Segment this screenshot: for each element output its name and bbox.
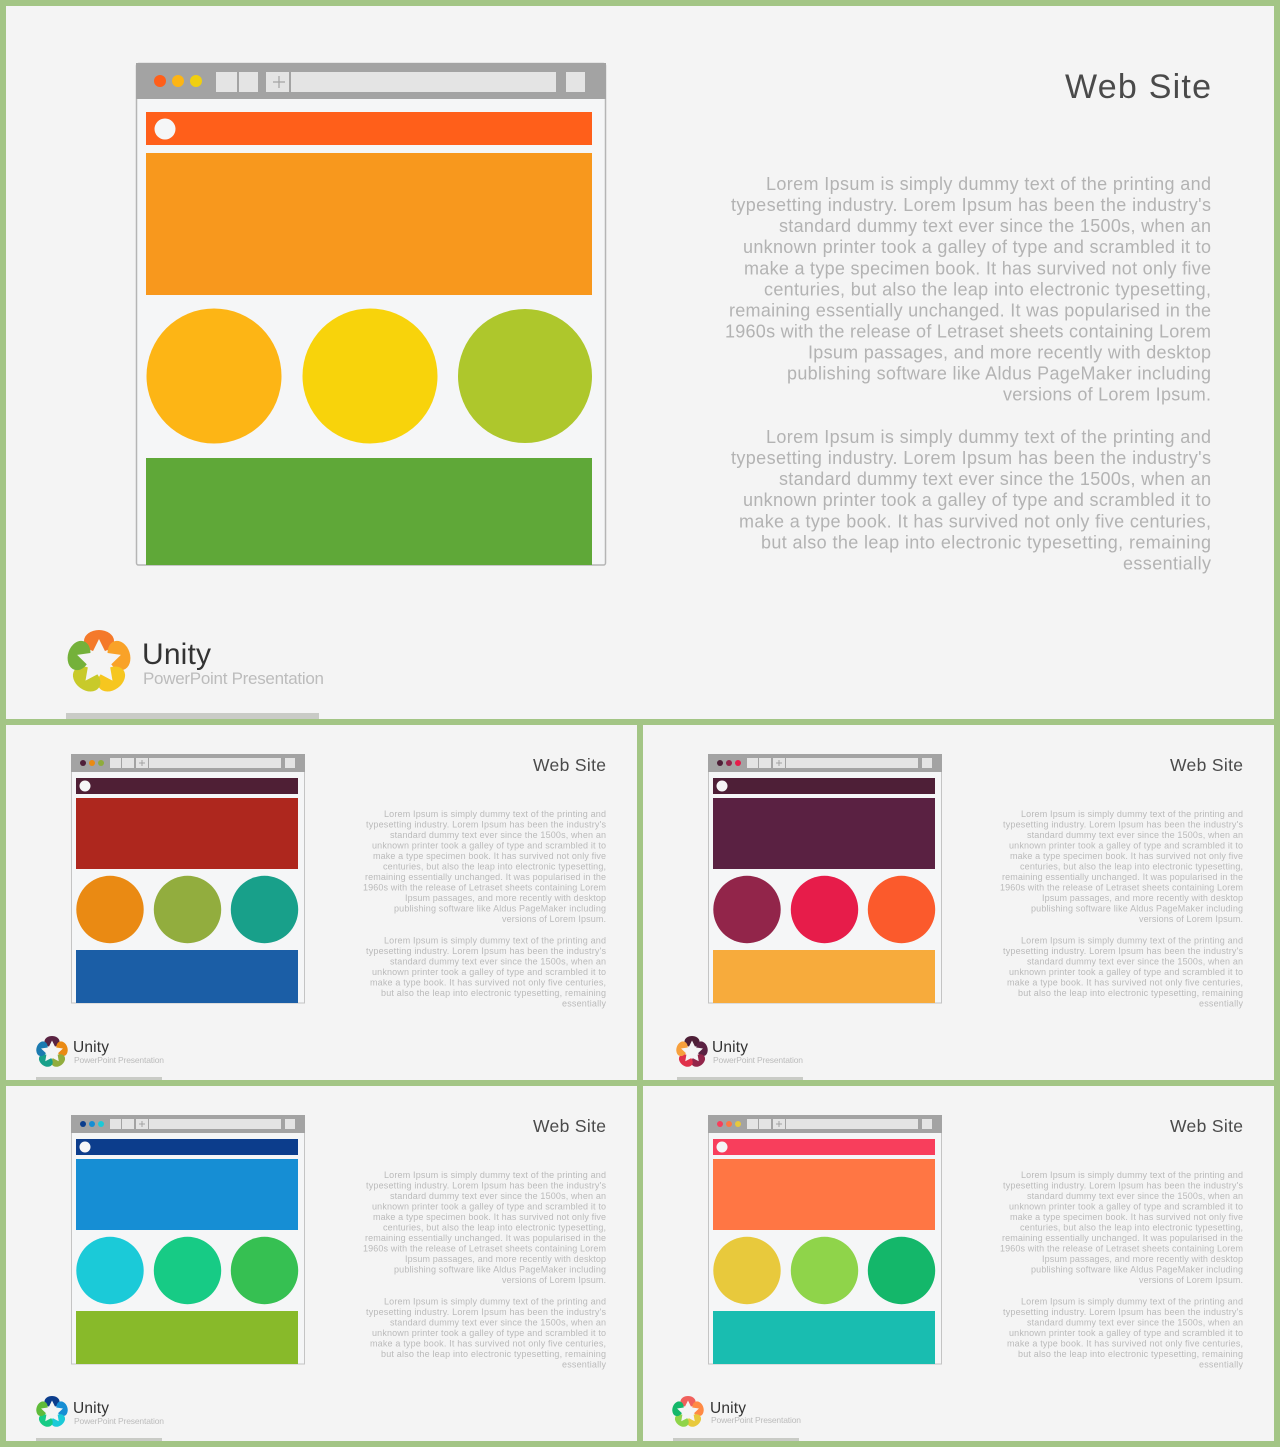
text block: Lorem Ipsum is simply dummy text of the printing and [1021,809,1243,819]
text block: remaining essentially unchanged. It was popularised in the [729,300,1211,320]
text block: but also the leap into electronic typesetting, remaining [761,532,1211,552]
text block: typesetting industry. Lorem Ipsum has been the industry's [1003,1307,1244,1317]
icon: logo [670,1396,706,1429]
text block: standard dummy text ever since the 1500s, when an [779,469,1211,489]
title: Web Site [1170,755,1243,775]
text block: unknown printer took a galley of type and scrambled it to [1009,1202,1243,1212]
text block: publishing software like Aldus PageMaker including [394,904,606,914]
text block: make a type book. It has survived not only five centuries, [1007,978,1243,988]
text block: versions of Lorem Ipsum. [1003,385,1211,405]
panel: red and blue variant [34,754,607,1080]
icon: logo [64,630,134,697]
brand name: Unity [710,1400,746,1417]
text block: typesetting industry. Lorem Ipsum has been the industry's [366,1307,606,1317]
text block: Lorem Ipsum is simply dummy text of the printing and [1021,1170,1243,1180]
text block: but also the leap into electronic typesetting, remaining [381,988,606,998]
text block: make a type book. It has survived not only five centuries, [1007,1338,1243,1348]
text block: publishing software like Aldus PageMaker including [787,364,1211,384]
brand subtitle: PowerPoint Presentation [713,1055,803,1065]
text block: Ipsum passages, and more recently with desktop [405,893,606,903]
text block: make a type specimen book. It has survived not only five [744,258,1211,278]
brand name: Unity [712,1039,748,1056]
text block: Lorem Ipsum is simply dummy text of the printing and [384,1170,606,1180]
text block: standard dummy text ever since the 1500s, when an [1027,830,1243,840]
text block: typesetting industry. Lorem Ipsum has been the industry's [1003,820,1244,830]
text block: essentially [1199,998,1244,1008]
title: Web Site [1170,1116,1243,1136]
title: Web Site [1065,68,1211,106]
text block: standard dummy text ever since the 1500s, when an [390,1191,606,1201]
text block: remaining essentially unchanged. It was popularised in the [1002,872,1243,882]
text block: typesetting industry. Lorem Ipsum has been the industry's [366,946,606,956]
text block: publishing software like Aldus PageMaker including [1031,1264,1243,1274]
icon: logo [34,1036,70,1069]
text block: make a type specimen book. It has survived not only five [373,851,606,861]
text block: unknown printer took a galley of type and scrambled it to [1009,1328,1243,1338]
text block: but also the leap into electronic typesetting, remaining [1018,988,1243,998]
text block: 1960s with the release of Letraset sheets containing Lorem [725,322,1211,342]
text block: but also the leap into electronic typesetting, remaining [1018,1349,1243,1359]
brand subtitle: PowerPoint Presentation [74,1416,164,1426]
text block: typesetting industry. Lorem Ipsum has been the industry's [1003,946,1244,956]
text block: unknown printer took a galley of type and scrambled it to [372,1202,606,1212]
text block: unknown printer took a galley of type and scrambled it to [1009,967,1243,977]
text block: remaining essentially unchanged. It was popularised in the [365,872,606,882]
text block [363,1170,606,1370]
text block: typesetting industry. Lorem Ipsum has been the industry's [366,820,606,830]
text block: standard dummy text ever since the 1500s, when an [1027,956,1243,966]
panel: maroon and coral variant [674,754,1244,1080]
browser window illustration [708,754,942,1003]
text block: remaining essentially unchanged. It was popularised in the [365,1233,606,1243]
text block: essentially [1123,554,1211,574]
brand name: Unity [142,638,211,671]
text block: standard dummy text ever since the 1500s, when an [779,216,1211,236]
text block: publishing software like Aldus PageMaker including [394,1264,606,1274]
text block: unknown printer took a galley of type and scrambled it to [743,237,1211,257]
text block: make a type specimen book. It has survived not only five [1010,1212,1243,1222]
text block: 1960s with the release of Letraset sheets containing Lorem [1000,882,1243,892]
text block: unknown printer took a galley of type and scrambled it to [372,967,606,977]
text block: Lorem Ipsum is simply dummy text of the printing and [384,936,606,946]
text block: Lorem Ipsum is simply dummy text of the printing and [384,1296,606,1306]
text block: make a type book. It has survived not only five centuries, [370,978,606,988]
text block: 1960s with the release of Letraset sheets containing Lorem [1000,1244,1243,1254]
brand subtitle: PowerPoint Presentation [711,1415,801,1425]
brand name: Unity [73,1039,109,1056]
panel: coral and teal variant [670,1115,1244,1441]
text block: centuries, but also the leap into electronic typesetting, [383,1222,606,1232]
text block: Lorem Ipsum is simply dummy text of the printing and [766,174,1211,194]
text block: remaining essentially unchanged. It was popularised in the [1002,1233,1243,1243]
text block: Lorem Ipsum is simply dummy text of the printing and [1021,936,1243,946]
text block: Lorem Ipsum is simply dummy text of the printing and [766,427,1211,447]
text block: standard dummy text ever since the 1500s, when an [1027,1318,1243,1328]
text block: typesetting industry. Lorem Ipsum has been the industry's [731,195,1211,215]
text block: essentially [562,998,606,1008]
text block: 1960s with the release of Letraset sheets containing Lorem [363,1244,606,1254]
text block: unknown printer took a galley of type and scrambled it to [372,1328,606,1338]
text block: centuries, but also the leap into electronic typesetting, [1020,1222,1243,1232]
text block: versions of Lorem Ipsum. [1139,1275,1243,1285]
panel: main slide [64,63,1211,719]
text block: make a type book. It has survived not only five centuries, [739,511,1211,531]
text block: centuries, but also the leap into electronic typesetting, [383,862,606,872]
text block [725,174,1211,574]
text block: 1960s with the release of Letraset sheets containing Lorem [363,882,606,892]
text block: essentially [562,1360,606,1370]
browser window illustration [71,754,305,1003]
text block: unknown printer took a galley of type and scrambled it to [743,490,1211,510]
text block: make a type specimen book. It has survived not only five [1010,851,1243,861]
text block: versions of Lorem Ipsum. [1139,914,1243,924]
text block: versions of Lorem Ipsum. [502,1275,606,1285]
browser window illustration [708,1115,942,1364]
text block [1000,809,1244,1008]
text block: typesetting industry. Lorem Ipsum has been the industry's [1003,1180,1244,1190]
text block: Ipsum passages, and more recently with desktop [405,1254,606,1264]
title: Web Site [533,755,606,775]
text block: make a type specimen book. It has survived not only five [373,1212,606,1222]
text block: Ipsum passages, and more recently with desktop [1042,893,1243,903]
text block: standard dummy text ever since the 1500s, when an [390,830,606,840]
text block: Ipsum passages, and more recently with desktop [808,343,1211,363]
browser window illustration [71,1115,305,1364]
text block: Lorem Ipsum is simply dummy text of the printing and [1021,1296,1243,1306]
panel: blue and green variant [34,1115,607,1441]
text block: but also the leap into electronic typesetting, remaining [381,1349,606,1359]
brand name: Unity [73,1400,109,1417]
text block: standard dummy text ever since the 1500s, when an [390,956,606,966]
text block: Ipsum passages, and more recently with desktop [1042,1254,1243,1264]
text block: standard dummy text ever since the 1500s, when an [1027,1191,1243,1201]
text block: publishing software like Aldus PageMaker including [1031,904,1243,914]
text block: centuries, but also the leap into electronic typesetting, [1020,862,1243,872]
brand subtitle: PowerPoint Presentation [143,669,324,688]
text block: typesetting industry. Lorem Ipsum has been the industry's [731,448,1211,468]
icon: logo [34,1396,70,1429]
text block: centuries, but also the leap into electronic typesetting, [764,279,1211,299]
icon: logo [674,1036,710,1069]
browser window illustration [136,63,606,565]
text block: make a type book. It has survived not only five centuries, [370,1338,606,1348]
title: Web Site [533,1116,606,1136]
text block: Lorem Ipsum is simply dummy text of the printing and [384,809,606,819]
text block: versions of Lorem Ipsum. [502,914,606,924]
text block: typesetting industry. Lorem Ipsum has been the industry's [366,1180,606,1190]
text block [1000,1170,1244,1370]
text block: standard dummy text ever since the 1500s, when an [390,1318,606,1328]
text block: unknown printer took a galley of type and scrambled it to [1009,840,1243,850]
text block: essentially [1199,1360,1244,1370]
text block [363,809,606,1008]
text block: unknown printer took a galley of type and scrambled it to [372,840,606,850]
brand subtitle: PowerPoint Presentation [74,1055,164,1065]
